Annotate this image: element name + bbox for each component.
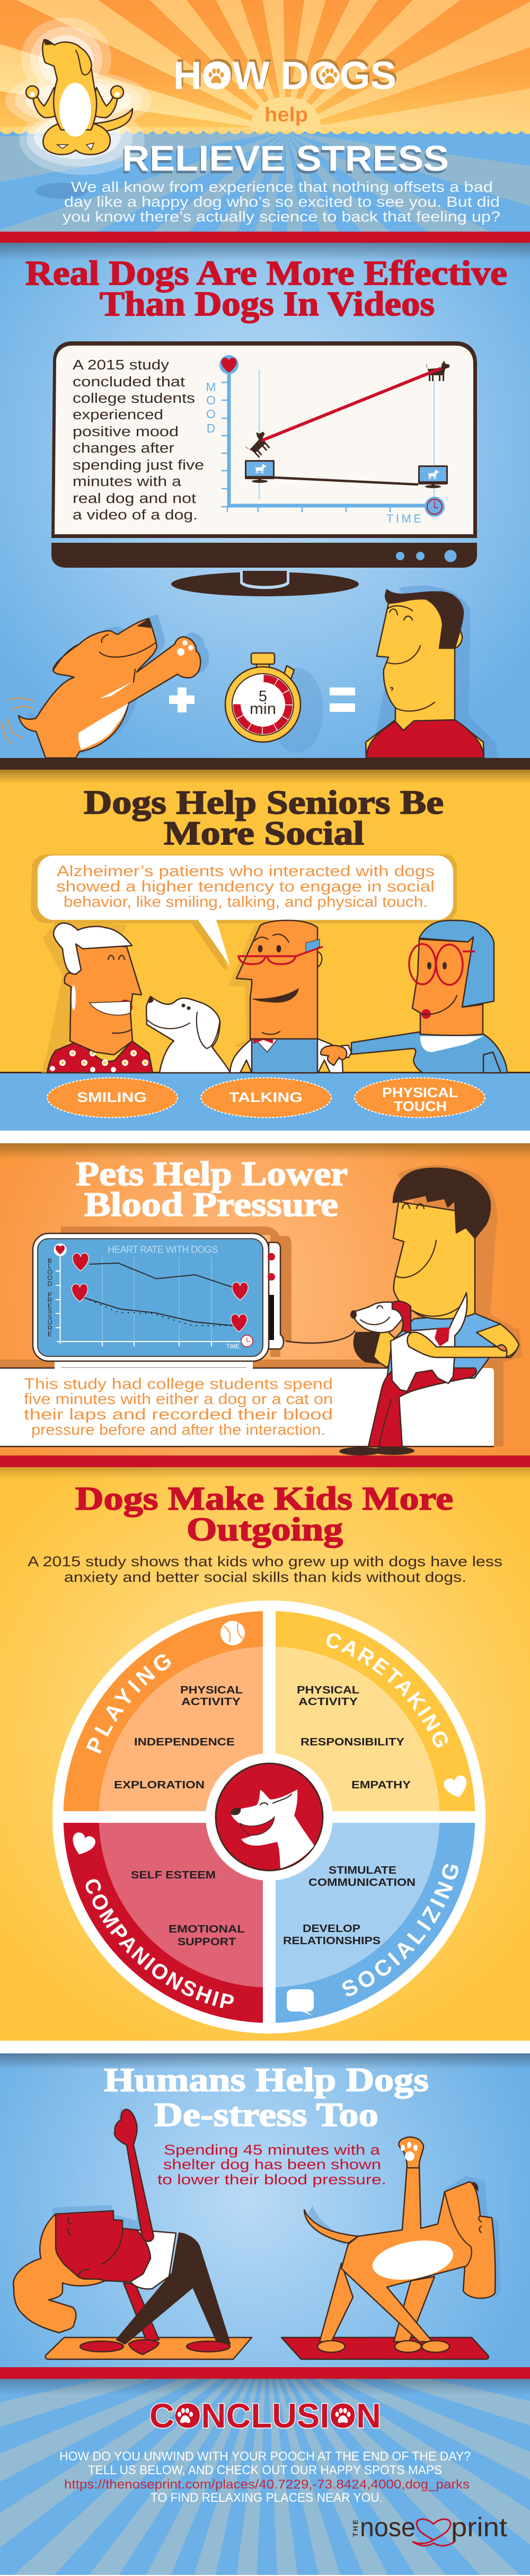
yoga mat: orange <box>46 2337 252 2359</box>
line chart: mood over time: D <box>207 421 215 435</box>
monitor: heart rate chart: D <box>48 1280 52 1287</box>
label: SOCIALIZING: SOCIALIZING <box>342 1864 458 1996</box>
labels: playing: EXPLORATION <box>114 1779 205 1791</box>
labels: caretaking: RESPONSIBILITY <box>301 1736 404 1748</box>
text: 2015 study: experienced <box>73 408 163 422</box>
red divider <box>0 2367 530 2379</box>
monitor: heart rate chart: TIME <box>226 1343 240 1350</box>
oval: PHYSICAL TOUCH: PHYSICAL <box>382 1084 458 1100</box>
text: 2015 study <box>73 358 204 523</box>
glow around dog <box>5 17 152 175</box>
text: call to action: TO FIND RELAXING PLACES NEAR YOU. <box>151 2491 383 2505</box>
chart: benefits wheel <box>52 1601 485 2033</box>
oval: TALKING <box>201 1078 331 1117</box>
text: call to action <box>59 2449 471 2505</box>
monitor: heart rate chart: E <box>48 1302 52 1310</box>
label: COMPANIONSHIP: COMPANIONSHIP <box>86 1879 234 2008</box>
text: kids study: A 2015 study shows that kids who grew up with dogs have less <box>28 1554 502 1569</box>
oval: PHYSICAL TOUCH <box>355 1078 485 1117</box>
table: This study had college students spend <box>24 1376 333 1393</box>
labels: caretaking: ACTIVITY <box>298 1696 358 1708</box>
heading: real dogs <box>25 254 507 323</box>
text: call to action: HOW DO YOU UNWIND WITH YOUR POOCH AT THE END OF THE DAY? <box>59 2449 471 2464</box>
text: kids study: anxiety and better social skills than kids without dogs. <box>64 1569 466 1585</box>
monitor: heart rate chart: O <box>47 1268 52 1276</box>
table: five minutes with either a dog or a cat on <box>24 1391 333 1408</box>
intro text: you know there’s actually science to back that feeling up? <box>63 208 500 225</box>
text: call to action: TELL US BELOW, AND CHECK OUT OUR HAPPY SPOTS MAPS <box>88 2463 442 2477</box>
text: 2015 study: college students <box>73 391 195 406</box>
sun <box>250 97 321 131</box>
label: PLAYING: PLAYING <box>86 1654 171 1754</box>
text: 2015 study: A 2015 study <box>73 358 169 373</box>
text: 2015 study: real dog and not <box>73 491 196 506</box>
dog: white puppy <box>146 996 230 1073</box>
heading: kids outgoing: Dogs Make Kids More <box>75 1481 453 1517</box>
oval: SMILING: SMILING <box>77 1089 147 1105</box>
labels: playing: INDEPENDENCE <box>134 1736 235 1748</box>
heading: blood pressure: Pets Help Lower <box>76 1155 348 1193</box>
heading: kids outgoing: Outgoing <box>187 1512 343 1548</box>
header background: sun rays <box>0 0 530 232</box>
labels: caretaking <box>297 1684 411 1791</box>
labels: companionship: SUPPORT <box>178 1936 236 1948</box>
panel: blood pressure <box>0 1143 530 1467</box>
monitor: heart rate chart: B <box>48 1257 52 1265</box>
labels: playing <box>114 1684 243 1791</box>
shadow under dog <box>36 183 87 199</box>
heading: real dogs: Than Dogs In Videos <box>100 285 435 323</box>
oval: TALKING: TALKING <box>229 1089 303 1105</box>
heading: seniors: More Social <box>164 814 364 852</box>
title: HOW DOGS: HOW DOGS <box>173 54 396 98</box>
panel: kids outgoing <box>0 1467 530 2053</box>
table <box>0 1360 504 1446</box>
panel: conclusion <box>0 2379 530 2575</box>
text: 2015 study: a video of a dog. <box>73 508 198 523</box>
icon: speech bubble small <box>287 1989 314 2016</box>
dog: yoga dog <box>304 2137 501 2352</box>
labels: caretaking: PHYSICAL <box>297 1684 359 1696</box>
labels: companionship: SELF ESTEEM <box>131 1869 216 1881</box>
line chart: mood over time: O <box>206 393 216 407</box>
labels: companionship: EMOTIONAL <box>169 1923 245 1935</box>
heading: humans help dogs: Humans Help Dogs <box>104 2061 429 2098</box>
person: yoga woman <box>13 2107 230 2354</box>
icon: heart caretaking <box>443 1774 470 1801</box>
line chart: mood over time: TIME <box>386 512 421 525</box>
text: shelter dog: shelter dog has been shown <box>163 2157 381 2173</box>
intro text: day like a happy dog who’s so excited to see you. But did <box>64 193 500 210</box>
panel: seniors <box>0 770 530 1143</box>
word: help: help <box>264 104 308 126</box>
speech bubble <box>31 854 457 970</box>
labels: socializing: STIMULATE <box>329 1864 396 1876</box>
symbol: plus <box>169 687 195 712</box>
monitor: heart rate chart: P <box>48 1291 52 1299</box>
logo: the noseprint: print <box>451 2512 507 2542</box>
labels: playing: ACTIVITY <box>181 1696 241 1708</box>
text: 2015 study: spending just five <box>73 458 204 473</box>
oval: SMILING <box>47 1078 178 1117</box>
icon: dog high five <box>2 614 209 758</box>
monitor: heart rate chart: S <box>48 1313 52 1321</box>
intro text: We all know from experience that nothing offsets a bad <box>71 179 493 195</box>
table: pressure before and after the interaction. <box>31 1422 325 1439</box>
line chart: mood over time: O <box>206 407 216 421</box>
line chart: mood over time: M <box>206 380 216 394</box>
icon: stopwatch 5 min: min <box>250 700 276 718</box>
labels: playing: PHYSICAL <box>180 1684 243 1696</box>
text: kids study <box>28 1554 502 1585</box>
text: 2015 study: minutes with a <box>73 474 182 489</box>
heading: seniors <box>84 783 444 852</box>
labels: socializing: RELATIONSHIPS <box>283 1935 381 1947</box>
logo: the noseprint <box>351 2512 507 2546</box>
text: 2015 study: concluded that <box>73 375 185 390</box>
monitor <box>51 341 477 596</box>
text: 2015 study: changes after <box>73 441 175 456</box>
speech bubble: Alzheimer’s patients who interacted with dogs <box>57 863 435 880</box>
icon: happy man <box>366 586 498 758</box>
monitor: heart rate chart: E <box>48 1330 52 1338</box>
monitor: heart rate chart: R <box>48 1325 52 1332</box>
speech bubble: behavior, like smiling, talking, and physical touch. <box>64 894 428 911</box>
symbol: equals <box>330 687 355 712</box>
text: shelter dog: to lower their blood pressure. <box>157 2172 386 2187</box>
monitor: heart rate chart: U <box>48 1319 52 1326</box>
logo: the noseprint: nose <box>360 2512 416 2542</box>
speech bubble: showed a higher tendency to engage in social <box>56 878 435 895</box>
person: woman with glasses <box>321 920 507 1073</box>
heading: blood pressure <box>76 1155 348 1224</box>
heading: conclusion: CONCLUSION <box>149 2396 381 2435</box>
icon: stopwatch 5 min <box>225 653 323 753</box>
labels: socializing: DEVELOP <box>303 1922 360 1935</box>
label: CARETAKING: CARETAKING <box>326 1634 448 1748</box>
person: talking man <box>228 920 343 1073</box>
oval: PHYSICAL TOUCH: TOUCH <box>394 1098 447 1114</box>
title: RELIEVE STRESS: RELIEVE STRESS <box>122 138 449 179</box>
heading: humans help dogs <box>104 2061 429 2133</box>
monitor: heart rate chart: HEART RATE WITH DOGS <box>108 1245 218 1255</box>
text: shelter dog <box>157 2142 386 2187</box>
panel: humans help dogs <box>0 2053 530 2367</box>
panel: real dogs vs videos <box>0 243 530 770</box>
monitor: heart rate chart: L <box>48 1263 52 1270</box>
icon: center dog <box>216 1763 323 1871</box>
heading: real dogs: Real Dogs Are More Effective <box>25 254 507 293</box>
text: shelter dog: Spending 45 minutes with a <box>164 2142 381 2158</box>
text: 2015 study: positive mood <box>73 425 179 439</box>
labels: companionship <box>131 1869 245 1948</box>
yoga mat: red <box>281 2337 489 2359</box>
monitor: heart rate chart: S <box>48 1308 52 1315</box>
labels: caretaking: EMPATHY <box>351 1779 411 1791</box>
logo: the noseprint: THE <box>351 2520 359 2537</box>
labels: socializing <box>283 1864 416 1947</box>
heading: humans help dogs: De-stress Too <box>154 2096 378 2133</box>
heading: seniors: Dogs Help Seniors Be <box>84 783 444 821</box>
heading: blood pressure: Blood Pressure <box>84 1186 338 1224</box>
red divider <box>0 232 530 243</box>
intro text <box>63 179 500 225</box>
table: their laps and recorded their blood <box>24 1406 333 1423</box>
text: call to action: https://thenoseprint.com/places/40.7229,-73.8424,4000,dog_parks <box>64 2477 470 2492</box>
person: grandmother <box>41 920 153 1073</box>
person: man with dog on lap <box>339 1165 522 1455</box>
icon: ball <box>220 1621 245 1645</box>
icon: heart companionship <box>68 1831 97 1858</box>
labels: socializing: COMMUNICATION <box>308 1876 416 1889</box>
heading: kids outgoing <box>75 1481 453 1548</box>
monitor: heart rate chart: O <box>47 1274 52 1282</box>
line chart: mood over time <box>206 355 449 525</box>
icon: stopwatch 5 min: 5 <box>259 688 267 705</box>
icon: meditating dog <box>26 40 132 155</box>
monitor: heart rate chart: R <box>48 1296 52 1304</box>
monitor: heart rate chart <box>33 1227 355 1369</box>
